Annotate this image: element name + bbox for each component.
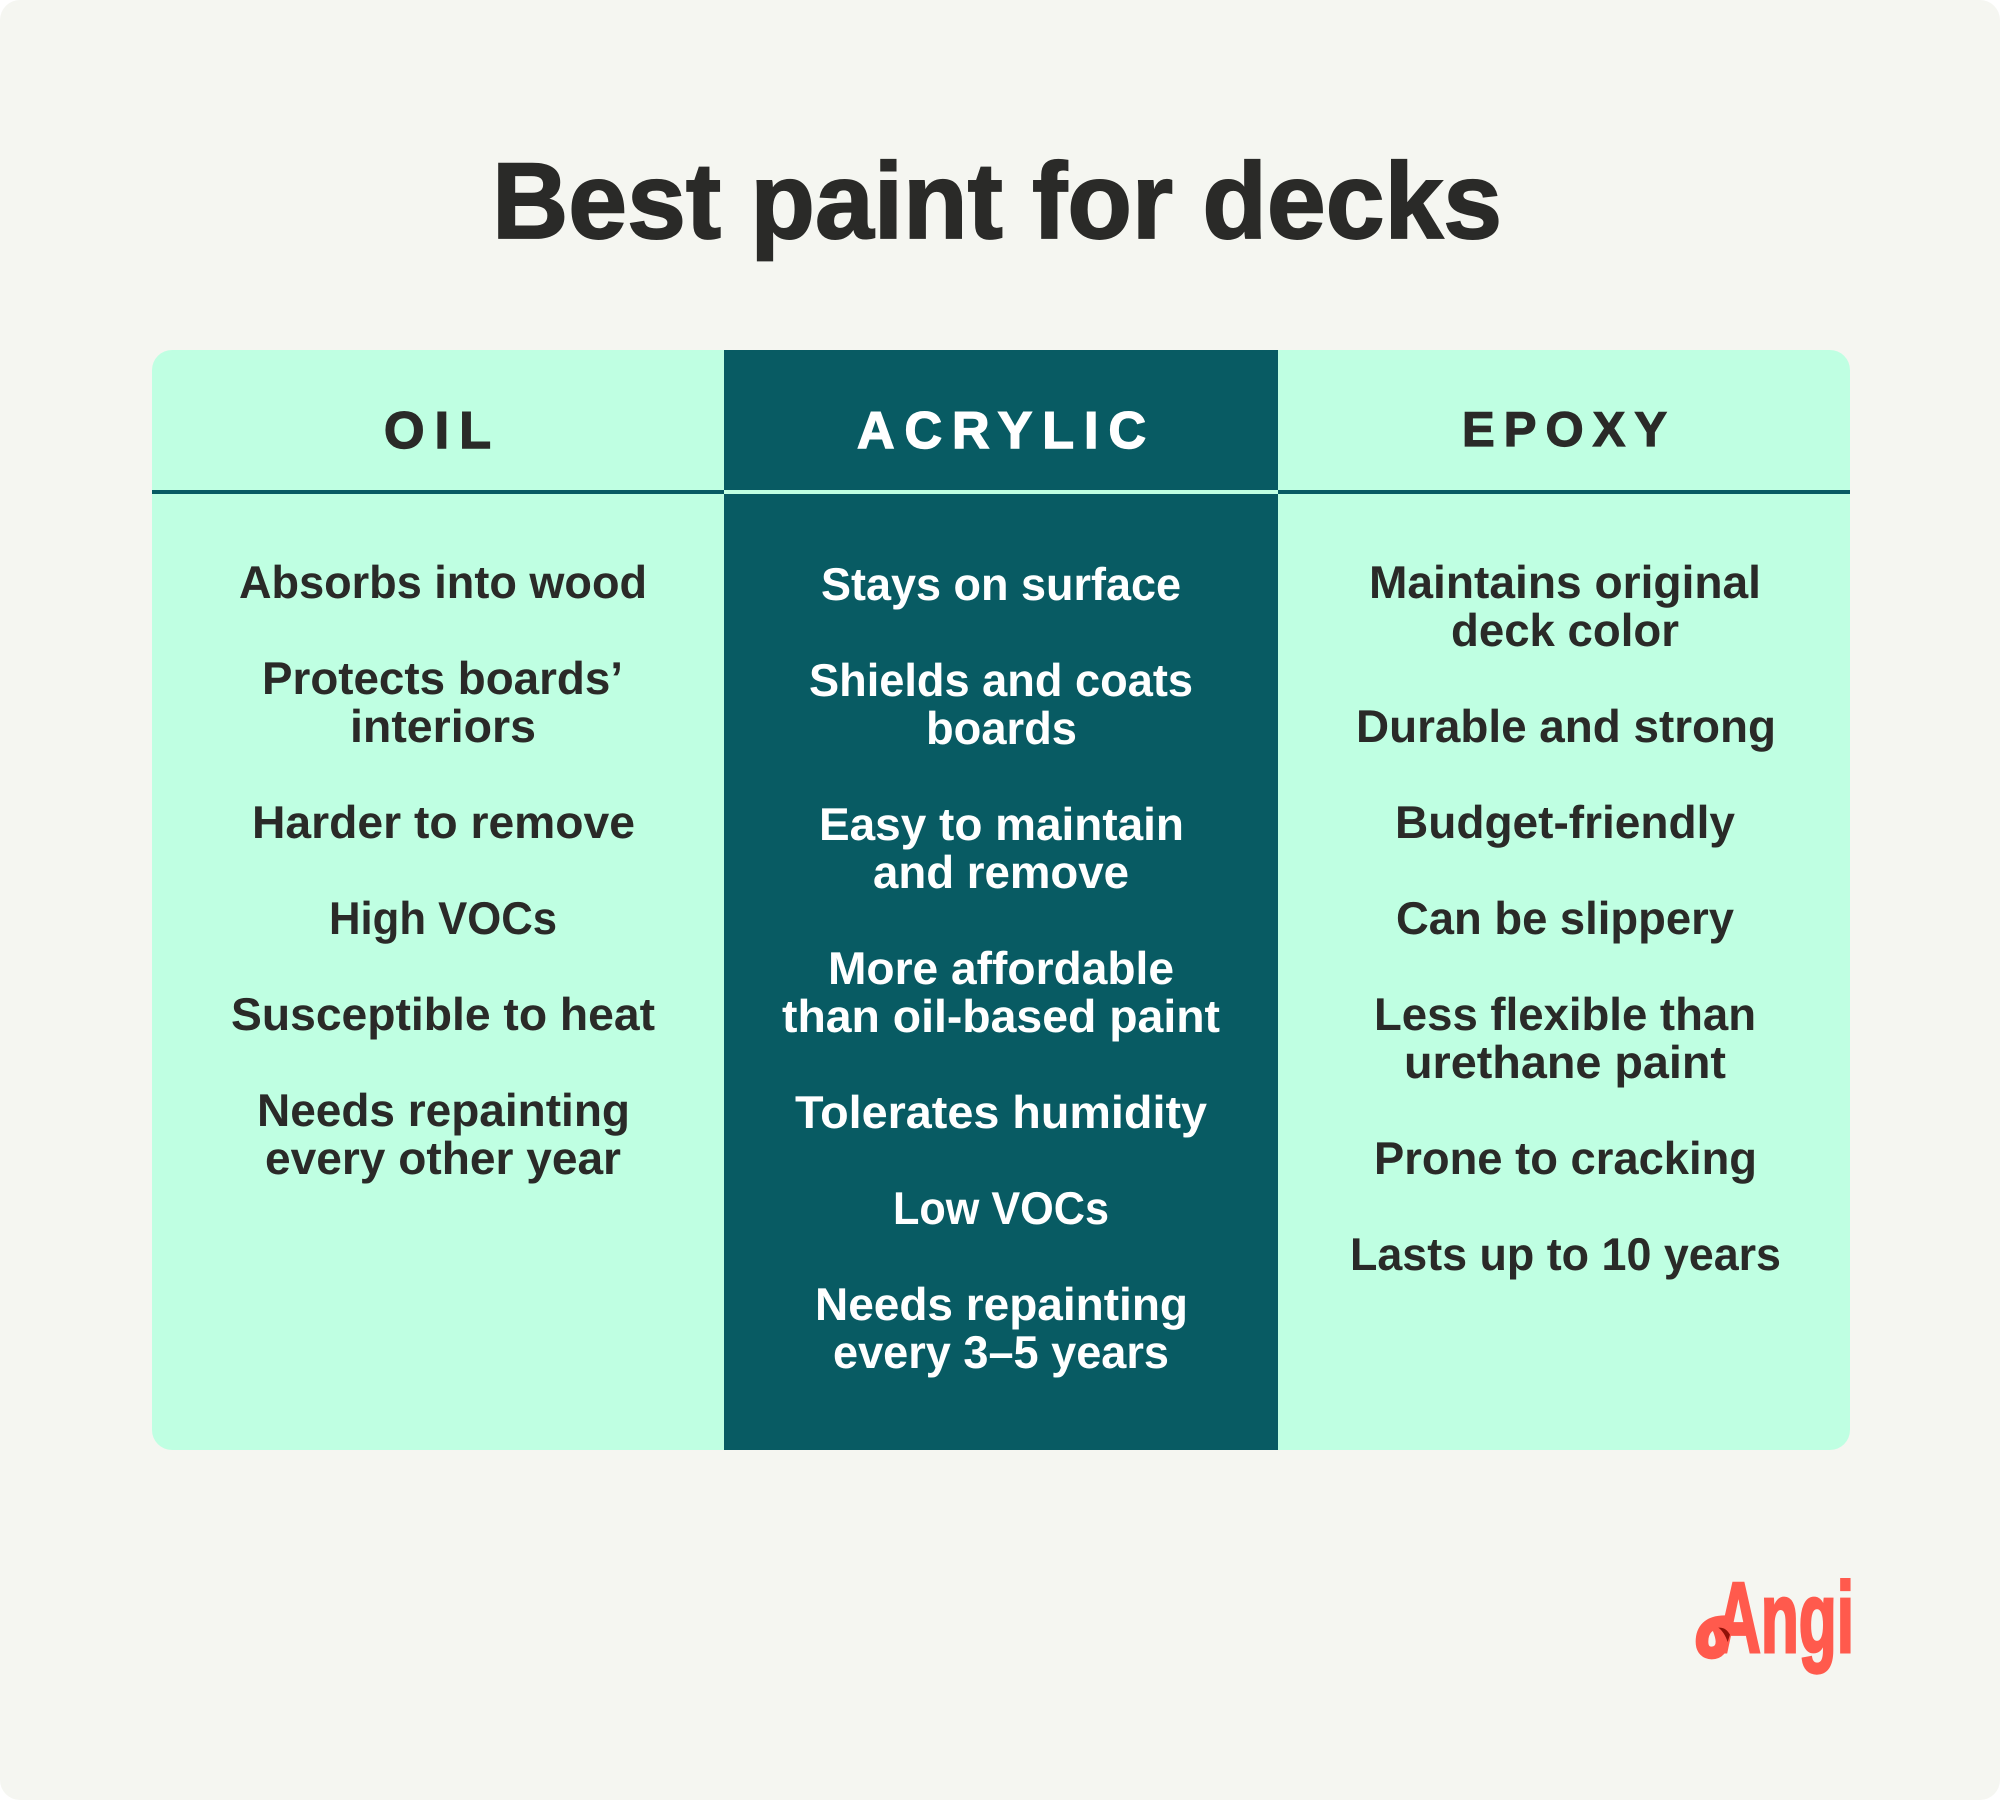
item: easy to maintain and remove: and remove [873, 846, 1129, 898]
item: can be slippery: Can be slippery [1396, 892, 1734, 944]
item: needs repainting every 3-5 years: every 3–5 years [833, 1326, 1169, 1378]
epoxy column background [1278, 350, 1850, 1450]
acrylic header rule [724, 490, 1278, 494]
item: more affordable than oil-based paint: More affordable [828, 942, 1174, 994]
item: harder to remove: Harder to remove [252, 796, 635, 848]
item: shields and coats boards: Shields and coats [809, 654, 1193, 706]
oil column background [152, 350, 724, 1450]
item: maintains original deck color [1369, 556, 1761, 656]
item: lasts up to 10 years: Lasts up to 10 years [1350, 1228, 1781, 1280]
item: needs repainting every other year [257, 1084, 630, 1184]
item: shields and coats boards [809, 654, 1193, 754]
epoxy header rule [1278, 490, 1850, 494]
epoxy heading: EPOXY [1462, 403, 1667, 457]
acrylic column background [724, 350, 1278, 1450]
oil heading: OIL [384, 402, 491, 460]
item: more affordable than oil-based paint: than oil-based paint [782, 990, 1220, 1042]
oil header rule [152, 490, 724, 494]
item: more affordable than oil-based paint [782, 942, 1220, 1042]
item: absorbs into wood: Absorbs into wood [239, 556, 647, 608]
item: needs repainting every 3-5 years: Needs repainting [815, 1278, 1188, 1330]
item: protects boards' interiors: Protects boards’ [262, 652, 623, 704]
item: protects boards' interiors [262, 652, 623, 752]
title: Best paint for decks [492, 140, 1502, 261]
item: stays on surface: Stays on surface [821, 558, 1181, 610]
item: protects boards' interiors: interiors [350, 700, 536, 752]
panel: oil [152, 350, 724, 1450]
item: maintains original deck color: Maintains original [1369, 556, 1761, 608]
item: easy to maintain and remove: Easy to maintain [819, 798, 1184, 850]
oil list [231, 556, 655, 1184]
item: high VOCs: High VOCs [329, 892, 557, 944]
item: budget-friendly: Budget-friendly [1395, 796, 1735, 848]
item: prone to cracking: Prone to cracking [1374, 1132, 1757, 1184]
item: tolerates humidity: Tolerates humidity [795, 1086, 1207, 1138]
panel: epoxy [1278, 350, 1850, 1450]
panel: acrylic [724, 350, 1278, 1450]
item: needs repainting every 3-5 years [815, 1278, 1188, 1378]
item: needs repainting every other year: Needs repainting [257, 1084, 630, 1136]
epoxy list [1350, 556, 1781, 1280]
acrylic list [782, 558, 1220, 1378]
item: susceptible to heat: Susceptible to heat [231, 988, 655, 1040]
item: low VOCs: Low VOCs [893, 1182, 1109, 1234]
logo: Angi [1702, 1562, 1854, 1674]
logo: Angi: Angi [1716, 1562, 1854, 1674]
item: maintains original deck color: deck color [1451, 604, 1679, 656]
acrylic heading: ACRYLIC [857, 402, 1146, 460]
item: durable and strong: Durable and strong [1356, 700, 1776, 752]
item: less flexible than urethane paint [1374, 988, 1756, 1088]
item: less flexible than urethane paint: Less flexible than [1374, 988, 1756, 1040]
item: less flexible than urethane paint: urethane paint [1404, 1036, 1726, 1088]
item: easy to maintain and remove [819, 798, 1184, 898]
item: needs repainting every other year: every other year [265, 1132, 621, 1184]
item: shields and coats boards: boards [926, 702, 1077, 754]
